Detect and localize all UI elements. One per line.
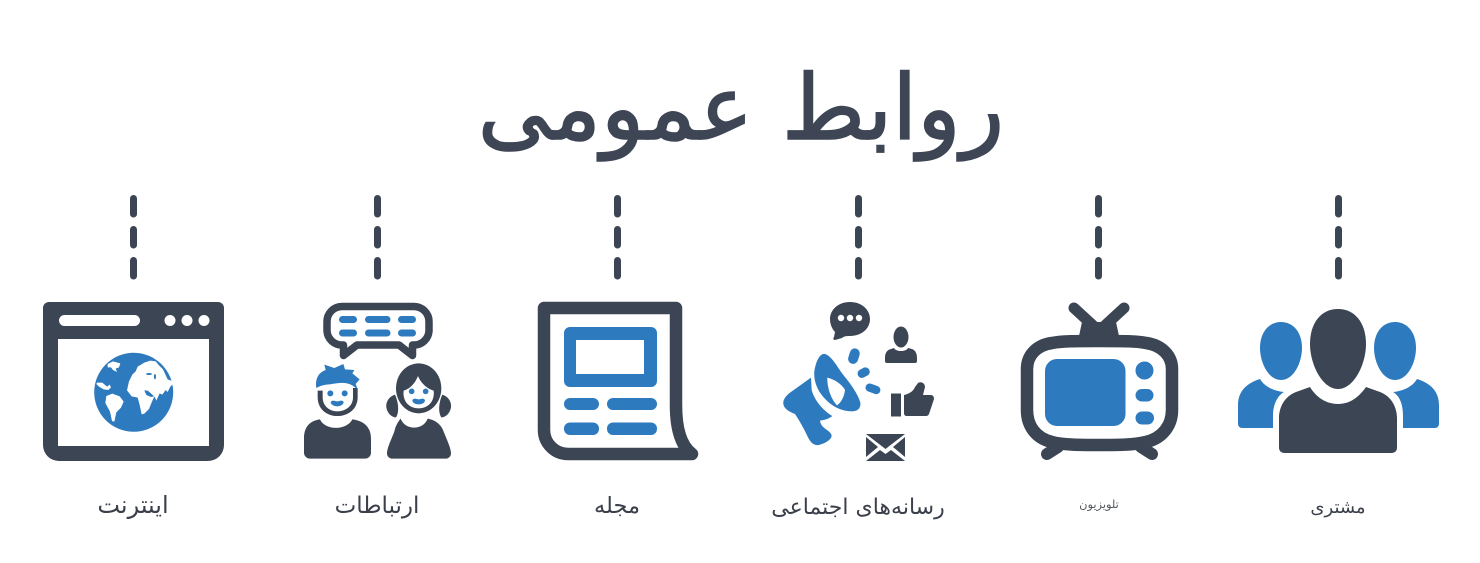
speech bubble: [327, 306, 429, 356]
label: magazine: مجله: [594, 493, 640, 519]
person: [885, 326, 917, 363]
label: social media: رسانه‌های اجتماعی: [771, 495, 945, 520]
thumbs up: [891, 382, 934, 416]
title: روابط عمومی: [478, 56, 1004, 162]
megaphone: [783, 347, 882, 445]
envelope: [866, 434, 905, 461]
icon: retro television: [1027, 308, 1172, 454]
label: communications: ارتباطات: [335, 493, 419, 519]
label: customer: مشتری: [1310, 497, 1366, 518]
boy: [304, 364, 371, 459]
label: television: تلویزیون: [1079, 497, 1119, 512]
icon: browser window with globe: [43, 302, 224, 461]
girl: [386, 363, 451, 459]
chat bubble: [830, 302, 870, 340]
label: internet: اینترنت: [97, 491, 169, 519]
dashed connectors: [134, 198, 1338, 276]
icon: magazine page: [544, 308, 692, 454]
icon: two people talking: [304, 306, 451, 459]
icon: customers group: [1238, 309, 1439, 453]
icon: social media megaphone: [783, 302, 934, 461]
